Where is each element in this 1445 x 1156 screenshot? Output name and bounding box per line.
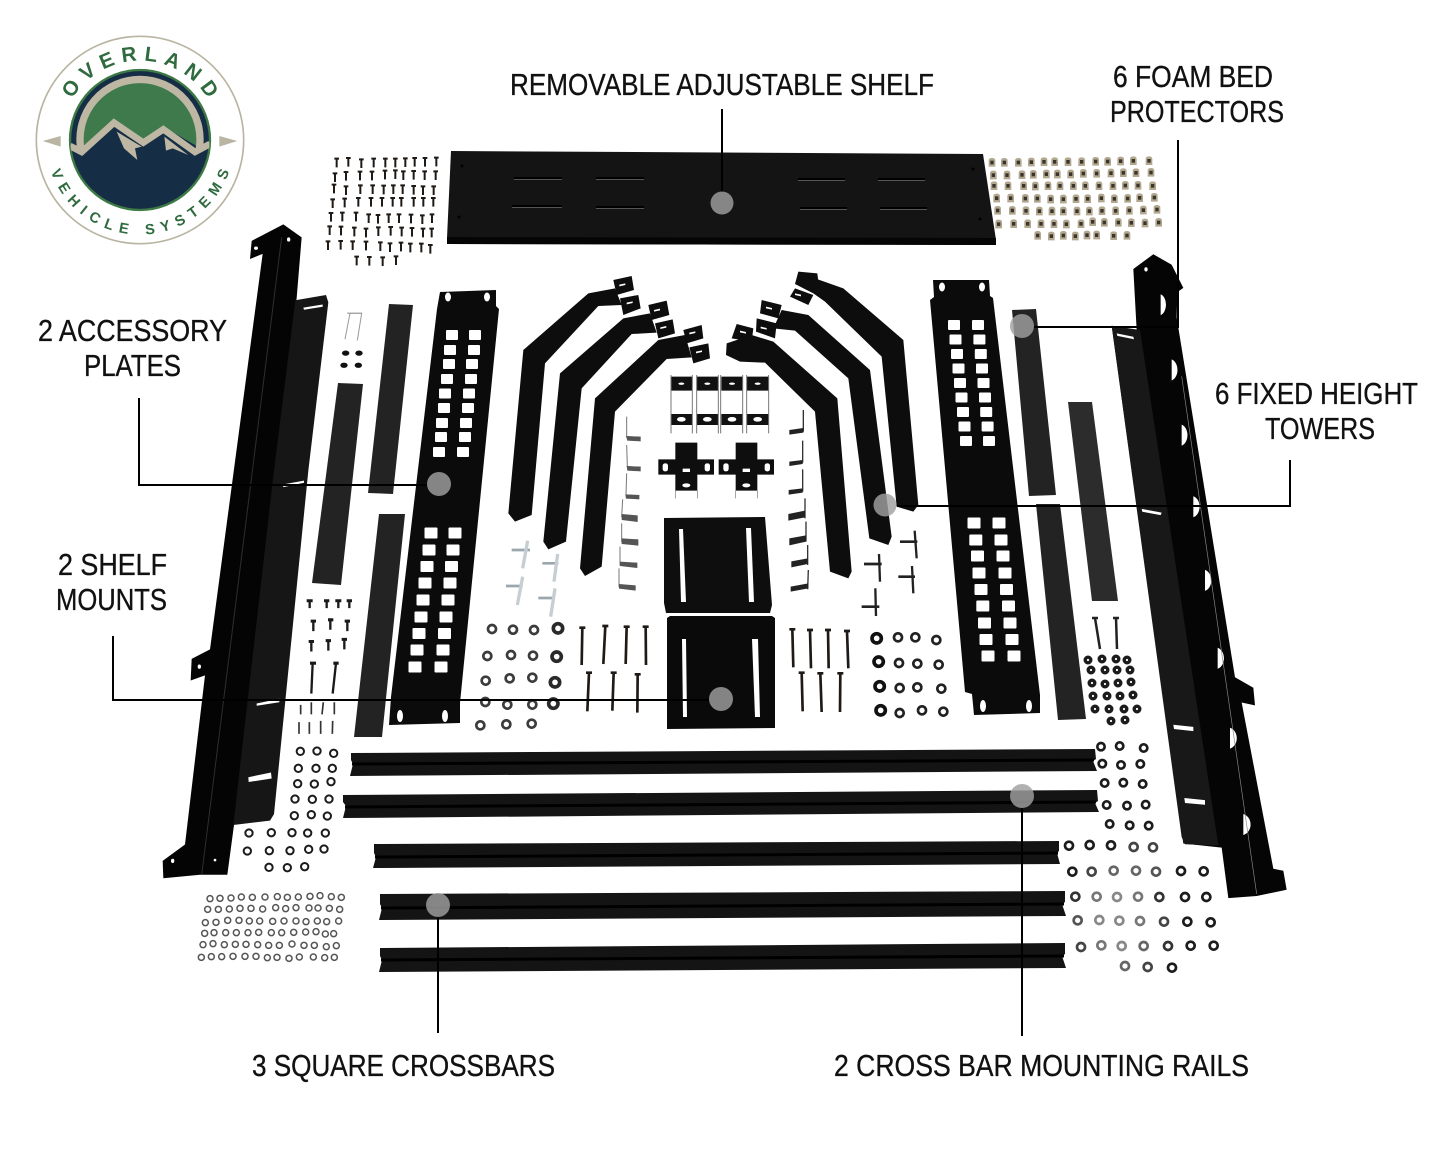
crossbars and mounting rails	[343, 749, 1099, 972]
heading: 6 foam bed protectors: 6 FOAM BED	[1113, 59, 1273, 94]
logo: Overland Vehicle Systems: VEHICLE SYSTEMS	[52, 168, 228, 234]
hex keys and small hardware left	[299, 313, 363, 734]
heading: 2 shelf mounts: 2 SHELF	[58, 547, 167, 582]
right long bolts	[1092, 618, 1119, 649]
heading: 2 shelf mounts	[56, 547, 167, 617]
small washers right of strips	[1085, 656, 1140, 724]
heading: 6 foam bed protectors	[1110, 59, 1284, 129]
leader lines	[113, 109, 1290, 1036]
foam bed protector strips	[312, 304, 1118, 737]
clips row	[671, 375, 769, 433]
accessory plate left	[389, 290, 499, 725]
washers center right	[872, 633, 947, 717]
logo: Overland Vehicle Systems	[36, 36, 244, 244]
screws top left	[326, 158, 439, 266]
heading: 6 fixed height towers	[1215, 376, 1418, 446]
nuts top right	[989, 156, 1162, 240]
heading: 2 accessory plates: PLATES	[84, 348, 181, 383]
cross brackets	[658, 443, 774, 498]
L brackets	[619, 410, 808, 592]
right mounting rail and plate	[1112, 254, 1287, 898]
heading: 3 square crossbars: 3 SQUARE CROSSBARS	[252, 1048, 555, 1083]
left mounting rail and plate	[163, 224, 328, 878]
washers bottom right	[1065, 742, 1218, 972]
removable shelf	[447, 151, 996, 245]
washers near left rail	[244, 747, 337, 871]
callout dots	[426, 192, 1034, 917]
heading: 2 shelf mounts: MOUNTS	[56, 582, 167, 617]
T bolts	[506, 531, 917, 617]
washers center left	[476, 624, 563, 729]
heading: 2 cross bar mounting rails: 2 CROSS BAR MOUNTING RAILS	[834, 1048, 1249, 1083]
heading: 6 foam bed protectors: PROTECTORS	[1110, 94, 1284, 129]
fixed height towers (six arms)	[508, 272, 918, 578]
small washers bottom left	[198, 893, 344, 961]
heading: 2 accessory plates	[38, 313, 227, 383]
logo: Overland Vehicle Systems: OVERLAND	[63, 46, 217, 96]
carriage bolts	[579, 626, 850, 713]
accessory plate right	[930, 280, 1040, 715]
heading: 6 fixed height towers: TOWERS	[1265, 411, 1375, 446]
heading: 2 accessory plates: 2 ACCESSORY	[38, 313, 227, 348]
shelf mount brackets	[664, 517, 775, 729]
heading: removable adjustable shelf: REMOVABLE ADJUSTABLE SHELF	[510, 67, 934, 102]
